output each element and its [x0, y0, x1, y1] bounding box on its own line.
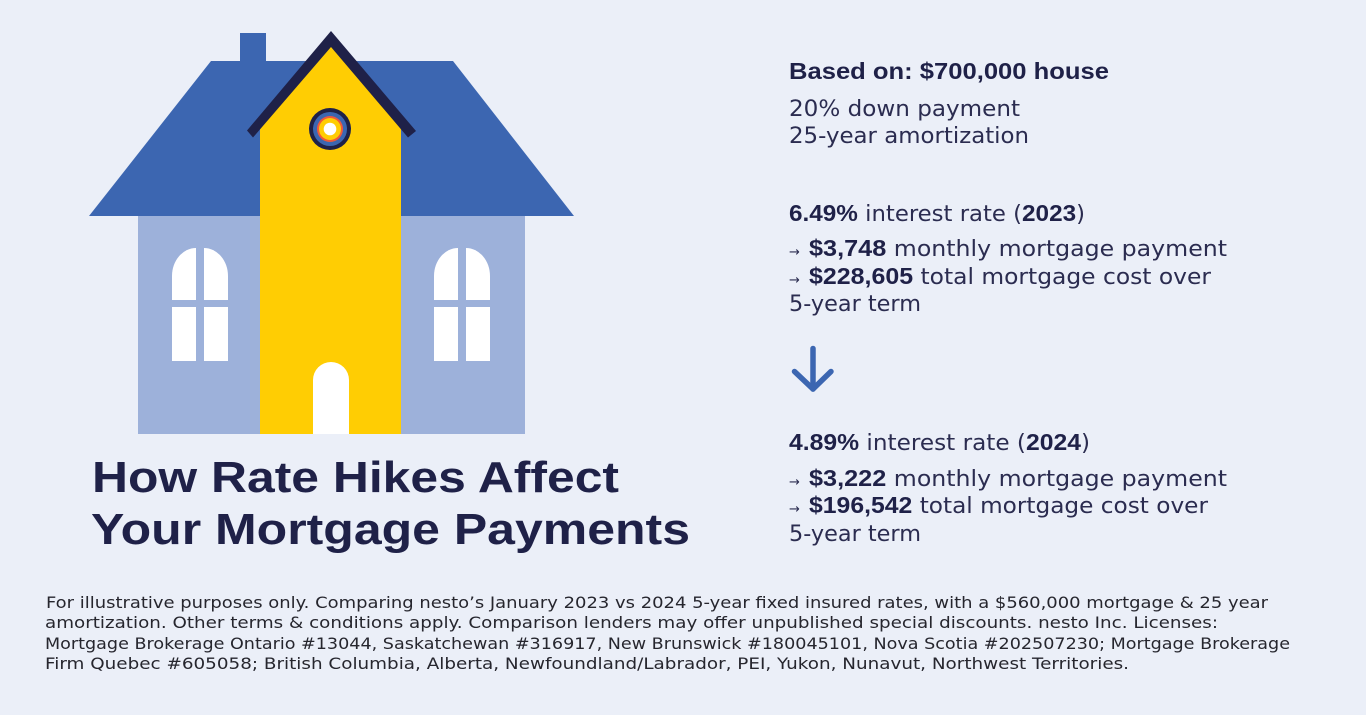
- illustration: house: [89, 31, 574, 434]
- 2024 monthly payment: →: [789, 475, 800, 490]
- 2024 monthly payment: $3,222 monthly mortgage payment: [809, 465, 1227, 492]
- 2023 monthly payment: $3,748 monthly mortgage payment: [809, 235, 1227, 262]
- 2023 total cost: 5-year term: [789, 292, 921, 317]
- 2023 monthly payment: →: [789, 245, 800, 260]
- 2023 total cost: →: [789, 273, 800, 288]
- arrow: down: [794, 348, 831, 389]
- title: [91, 453, 690, 554]
- footnote: [45, 593, 1290, 673]
- door: [313, 362, 349, 434]
- text block: based on: 20% down payment: [789, 97, 1020, 122]
- footnote: For illustrative purposes only. Comparing nesto’s January 2023 vs 2024 5-year fixed insured rates, with a $560,000 mortgage & 25 year: [46, 593, 1268, 612]
- yellow tower: [260, 40, 401, 434]
- title: Your Mortgage Payments: [91, 505, 690, 554]
- round attic window: [309, 108, 351, 150]
- house body: [138, 216, 525, 434]
- text block: 2023 rate: [789, 200, 1227, 317]
- 2023 total cost: [789, 263, 1212, 317]
- footnote: amortization. Other terms & conditions apply. Comparison lenders may offer unpublished special discounts. nesto Inc. Licenses:: [45, 613, 1218, 632]
- roof: [89, 61, 574, 216]
- text block: based on: [789, 58, 1109, 149]
- 2023 total cost: $228,605 total mortgage cost over: [809, 263, 1212, 290]
- 2024 total cost: →: [789, 502, 800, 517]
- footnote: Mortgage Brokerage Ontario #13044, Saskatchewan #316917, New Brunswick #180045101, Nova Scotia #202507230; Mortgage Brokerage: [45, 634, 1290, 653]
- title: How Rate Hikes Affect: [92, 453, 619, 502]
- right window: [434, 248, 490, 361]
- text block: based on: Based on: $700,000 house: [789, 58, 1109, 84]
- chimney: [240, 33, 266, 63]
- text block: 2024 rate: [789, 429, 1227, 547]
- left window: [172, 248, 228, 361]
- text block: based on: 25-year amortization: [789, 124, 1029, 149]
- 2024 total cost: [789, 492, 1209, 547]
- footnote: Firm Quebec #605058; British Columbia, Alberta, Newfoundland/Labrador, PEI, Yukon, Nunavut, Northwest Territories.: [45, 654, 1129, 673]
- 2024 total cost: $196,542 total mortgage cost over: [809, 492, 1209, 519]
- 2024 total cost: 5-year term: [789, 522, 921, 547]
- 2023 heading: 6.49% interest rate (2023): [789, 200, 1085, 227]
- tower roof chevron: [247, 31, 416, 138]
- 2024 heading: 4.89% interest rate ( 2024): [789, 429, 1090, 456]
